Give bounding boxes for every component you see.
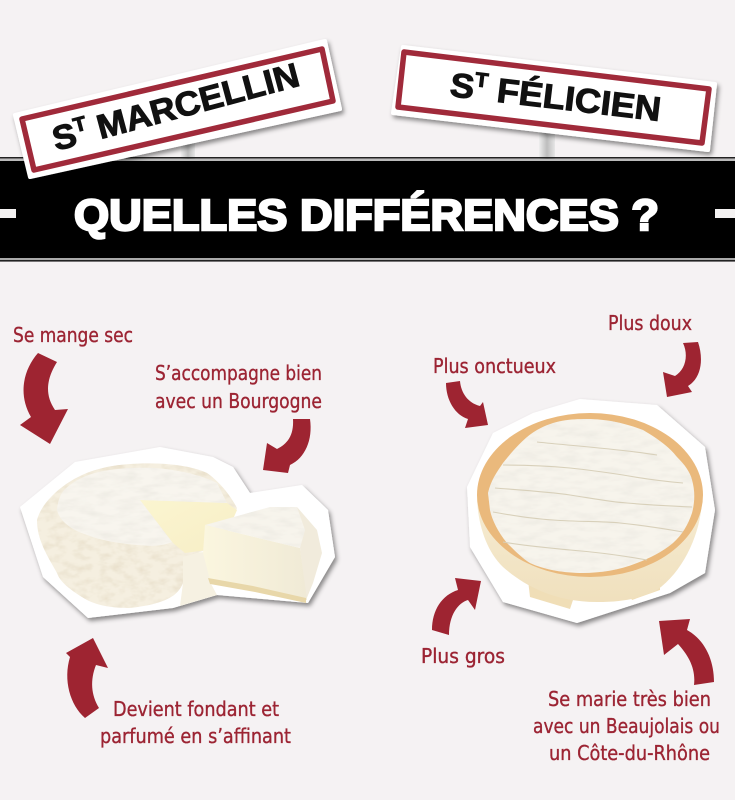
- text: Devient fondant: parfumé en s’affinant: [100, 724, 291, 748]
- text: Devient fondant: [100, 697, 291, 748]
- text: Devient fondant: Devient fondant et: [113, 697, 279, 721]
- cheese grooves: [493, 442, 692, 560]
- text: accompagne: S’accompagne bien: [155, 361, 322, 385]
- banner dash right: [715, 209, 735, 218]
- wooden box inner: [477, 413, 703, 577]
- text: Plus onctueux: Plus onctueux: [433, 354, 556, 378]
- cheese cut face: [140, 500, 237, 553]
- cheese wedge crust: [208, 578, 306, 603]
- text: Se mange sec: Se mange sec: [13, 323, 133, 347]
- cheese wedge top: [205, 507, 305, 548]
- road sign: St Marcellin: [15, 41, 340, 177]
- sign text: FÉLICIEN: [485, 71, 663, 129]
- arrow: Bourgogne: [263, 419, 311, 473]
- sign post: St Félicien: [539, 125, 555, 163]
- text: accompagne: [155, 361, 322, 413]
- arrow: Plus doux: [663, 342, 701, 397]
- sign text: MARCELLIN: [83, 56, 303, 149]
- cheese top: [488, 419, 694, 573]
- cheese photo: St Félicien: [467, 399, 715, 623]
- sign text: T: [474, 69, 489, 92]
- banner: [0, 157, 735, 262]
- cheese top: [57, 468, 227, 546]
- banner dash left: [0, 209, 16, 218]
- arrow: Se marie: [659, 619, 714, 685]
- cheese photo: St Marcellin: [20, 447, 335, 618]
- text: Plus doux: Plus doux: [608, 311, 692, 335]
- cheese wedge side: [297, 507, 322, 600]
- arrow: Devient fondant: [66, 638, 108, 718]
- text: accompagne: avec un Bourgogne: [155, 389, 322, 413]
- wooden box side: [477, 495, 702, 602]
- sign text: S: [448, 66, 475, 107]
- text: Se marie: Se marie très bien: [548, 687, 711, 711]
- arrow: Plus gros: [432, 578, 481, 635]
- arrow: Se mange sec: [20, 353, 68, 444]
- arrow: Plus onctueux: [446, 381, 488, 428]
- sign post: St Marcellin: [181, 115, 195, 163]
- cheese body rind: [37, 463, 237, 608]
- sign text: S: [48, 116, 80, 159]
- cheese wedge face: [203, 525, 307, 600]
- sign text: T: [71, 113, 89, 137]
- text: Se marie: un Côte-du-Rhône: [549, 741, 710, 765]
- wooden box feet: [528, 580, 575, 609]
- text: Plus gros: Plus gros: [421, 644, 505, 668]
- road sign: St Félicien: [393, 47, 715, 150]
- title: QUELLES DIFFÉRENCES ?: [74, 190, 659, 240]
- plate: [180, 552, 217, 606]
- text: Se marie: [533, 687, 720, 765]
